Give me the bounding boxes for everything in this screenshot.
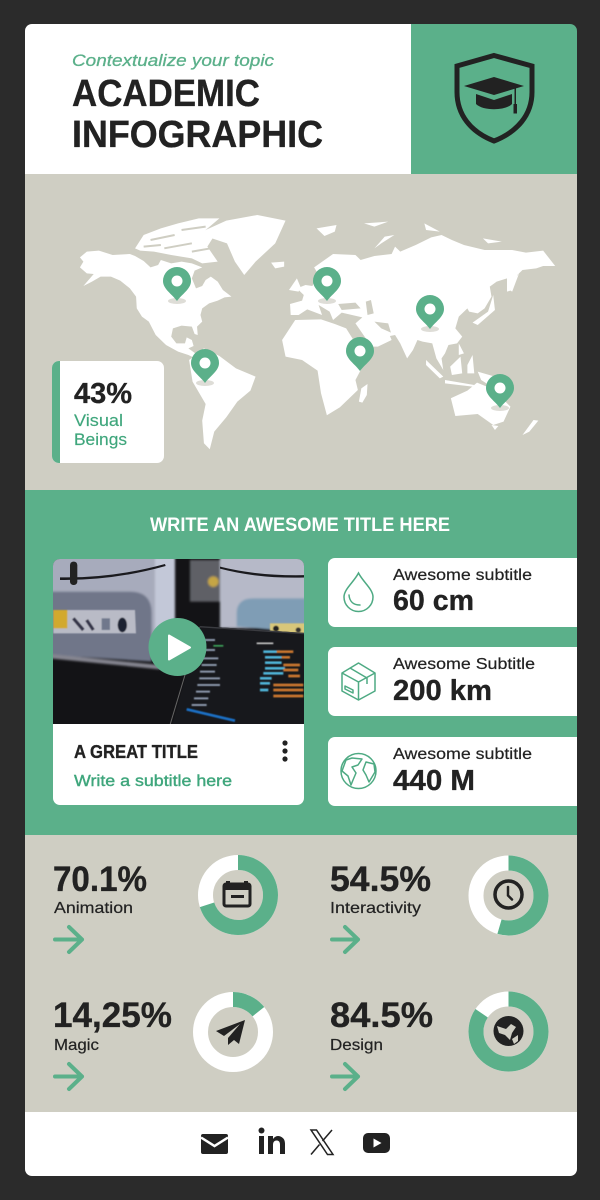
pin: South America [191,349,219,386]
callout: 43% visual beings: Beings [74,430,127,449]
arrow [332,1064,358,1089]
icon: x [311,1130,333,1154]
icon: clock [495,881,522,908]
title [72,79,322,148]
icon: earth [494,1016,524,1046]
stat card: 440 M [328,737,577,806]
callout: 43% visual beings: Visual [74,411,123,430]
stat card: 200 km [328,647,577,716]
arrow [55,927,82,952]
stat card: 200 km: 200 km [393,675,492,707]
stat card: 60 cm: 60 cm [393,585,474,617]
card title: A GREAT TITLE [74,742,198,762]
stat: design: 84.5% [330,996,433,1035]
stat: interactivity: 54.5% [330,860,431,899]
donut chart: 84.5% [476,999,541,1064]
icon: youtube [363,1133,390,1153]
arrow [332,927,358,952]
arrow [55,1064,82,1089]
stat: magic: Magic [54,1037,99,1054]
icon: linkedin [258,1128,285,1154]
donut chart: 70.1% [206,862,270,928]
icon: menu dots [282,740,288,762]
seas [338,300,391,332]
stat: animation [53,860,270,952]
icon: water drop [344,573,373,612]
pin: Europe [313,267,341,304]
section heading: WRITE AN AWESOME TITLE HERE [150,515,450,536]
icon: graduation shield [457,56,532,141]
stat card: 440 M: Awesome subtitle [393,746,532,763]
pin: Australia [486,374,514,411]
stat card: 440 M: 440 M [393,765,475,797]
play button [148,618,206,676]
callout: 43% visual beings: 43% [74,378,132,410]
stat: magic: 14,25% [53,996,172,1035]
stat: magic [53,996,266,1089]
video photo [50,557,310,727]
stat: animation: 70.1% [53,860,147,899]
icon: mail [201,1134,228,1154]
icon: globe [341,754,376,788]
tagline: Contextualize your topic [72,51,275,70]
stat card: 60 cm [328,558,577,627]
title: ACADEMIC [72,73,260,115]
icon: paper plane [216,1020,245,1045]
donut chart: 54.5% [476,863,541,928]
pin: North America [163,267,191,304]
panel: world map [25,174,577,490]
pin: Asia [416,295,444,332]
title: INFOGRAPHIC [72,114,323,156]
world map [80,215,555,449]
stat card: 200 km: Awesome Subtitle [393,656,535,673]
panel: footer [25,1112,577,1176]
icon: box [342,663,375,700]
card subtitle: Write a subtitle here [74,773,232,790]
stat: design [330,996,541,1089]
icon: calendar [224,881,250,906]
stat: design: Design [330,1037,383,1054]
stat: interactivity: Interactivity [330,900,421,917]
pin: Africa [346,337,374,371]
stat card: 60 cm: Awesome subtitle [393,567,532,584]
stat: interactivity [330,860,541,952]
panel: green section [25,490,577,835]
stat: animation: Animation [54,900,133,917]
video card [50,557,310,805]
panel: statistics [25,835,577,1112]
donut chart: 14.25% [200,1000,266,1064]
callout: 43% visual beings [52,361,164,463]
panel: header [25,24,577,174]
icon panel [411,24,577,174]
